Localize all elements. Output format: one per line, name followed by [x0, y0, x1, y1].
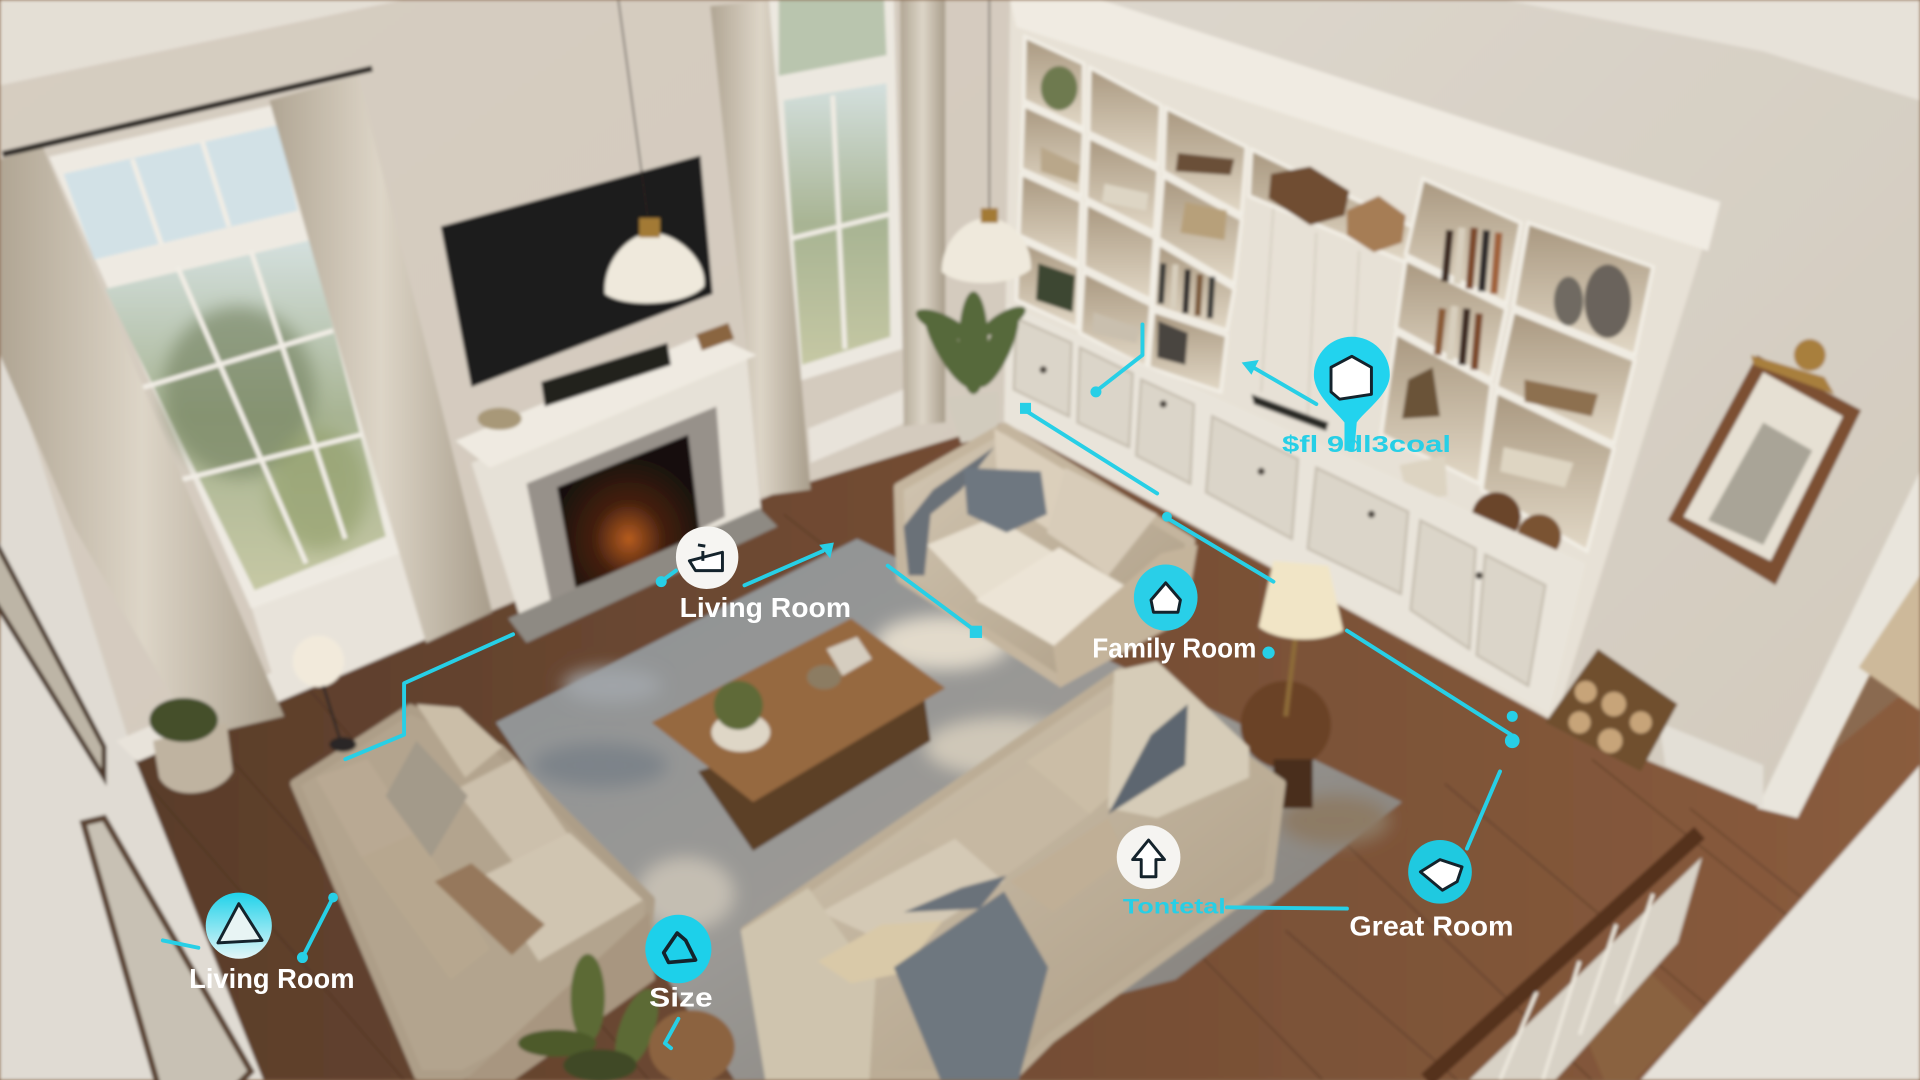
- small round table: [649, 1010, 735, 1080]
- fireplace: [456, 333, 778, 643]
- potted plant by window: [912, 291, 1030, 443]
- callout: Living Room left: Living Room: [189, 963, 354, 994]
- icon: up arrow: [1133, 840, 1164, 877]
- right wall: [1102, 0, 1920, 808]
- connector: upper cabinet: [1090, 324, 1142, 397]
- left floor lamp: [293, 636, 356, 752]
- coffee table: [651, 618, 945, 851]
- icon: tub: [689, 545, 722, 571]
- ceiling molding right: [1506, 0, 1920, 100]
- wall sconce: [1751, 339, 1834, 394]
- left wall: [0, 331, 263, 1080]
- icon: shoe: [218, 904, 262, 943]
- lower cabinets: [1004, 304, 1586, 713]
- floor planks: [147, 514, 1920, 1080]
- pendant lamp left: [605, 0, 704, 303]
- icon: cottage: [1151, 583, 1180, 612]
- left wall art upper: [0, 539, 104, 778]
- callout: Great Room: [1349, 840, 1513, 942]
- callout: Great Room: Great Room: [1349, 911, 1513, 942]
- staircase: [1427, 833, 1702, 1080]
- bookshelf body: [1004, 0, 1714, 722]
- callout: Sunroom shelf pin: $fl 9dl3coal: [1282, 431, 1451, 457]
- back wall: [0, 0, 1016, 759]
- mantel decor: [478, 323, 734, 430]
- curtain rod: [2, 69, 372, 154]
- callout: Tontetal: [1117, 825, 1347, 918]
- floor: [0, 422, 1920, 1080]
- left basket plant: [149, 698, 233, 793]
- bookshelf cornice: [1010, 0, 1720, 251]
- icon: house: [1331, 356, 1371, 399]
- callout: Size: Size: [649, 983, 713, 1013]
- callout: Living Room centre: [676, 527, 851, 623]
- callout: Family Room: [1092, 564, 1275, 664]
- lower right wall: [1641, 765, 1920, 1080]
- firewood rack: [1545, 649, 1678, 771]
- connector to shelf: [1242, 360, 1316, 404]
- left baseboards: [116, 389, 906, 762]
- centre window: [769, 0, 902, 382]
- callout: Size: [645, 915, 713, 1048]
- rug mottling: [533, 616, 1390, 931]
- callout: Tontetal: Tontetal: [1123, 895, 1226, 918]
- left window: [49, 100, 407, 609]
- framed art right: [1668, 355, 1861, 585]
- left wall art lower: [83, 818, 251, 1080]
- shelf cubbies: [1016, 37, 1653, 551]
- callout: Family Room: Family Room: [1092, 633, 1256, 664]
- left window curtains: [0, 76, 492, 737]
- pendant lamp right: [942, 0, 1031, 283]
- large foreground plant: [518, 954, 667, 1080]
- wall TV: [441, 156, 713, 387]
- centre panel grooves: [1261, 208, 1359, 441]
- left sofa: [295, 704, 655, 1080]
- connector: sofa to bookcase: [1020, 403, 1520, 849]
- shelf objects: [1036, 66, 1631, 558]
- ceiling molding left: [0, 0, 404, 86]
- icon: folded cloth: [1420, 860, 1462, 890]
- callout: Living Room left: [163, 893, 354, 994]
- side table with lamp: [1240, 561, 1343, 808]
- rug: [496, 539, 1402, 1080]
- connectors: Living Room centre: [656, 542, 982, 638]
- door casing and doorway: [1659, 471, 1920, 818]
- callout: Living Room centre: Living Room: [680, 592, 851, 623]
- callout: Sunroom shelf pin: [1282, 337, 1451, 457]
- centre window curtains: [710, 0, 945, 496]
- connector: left elbow: [345, 634, 513, 759]
- icon: blob: [664, 933, 696, 962]
- back sofa: [899, 427, 1198, 688]
- soundbar: [541, 343, 671, 407]
- right sofa: [741, 661, 1281, 1080]
